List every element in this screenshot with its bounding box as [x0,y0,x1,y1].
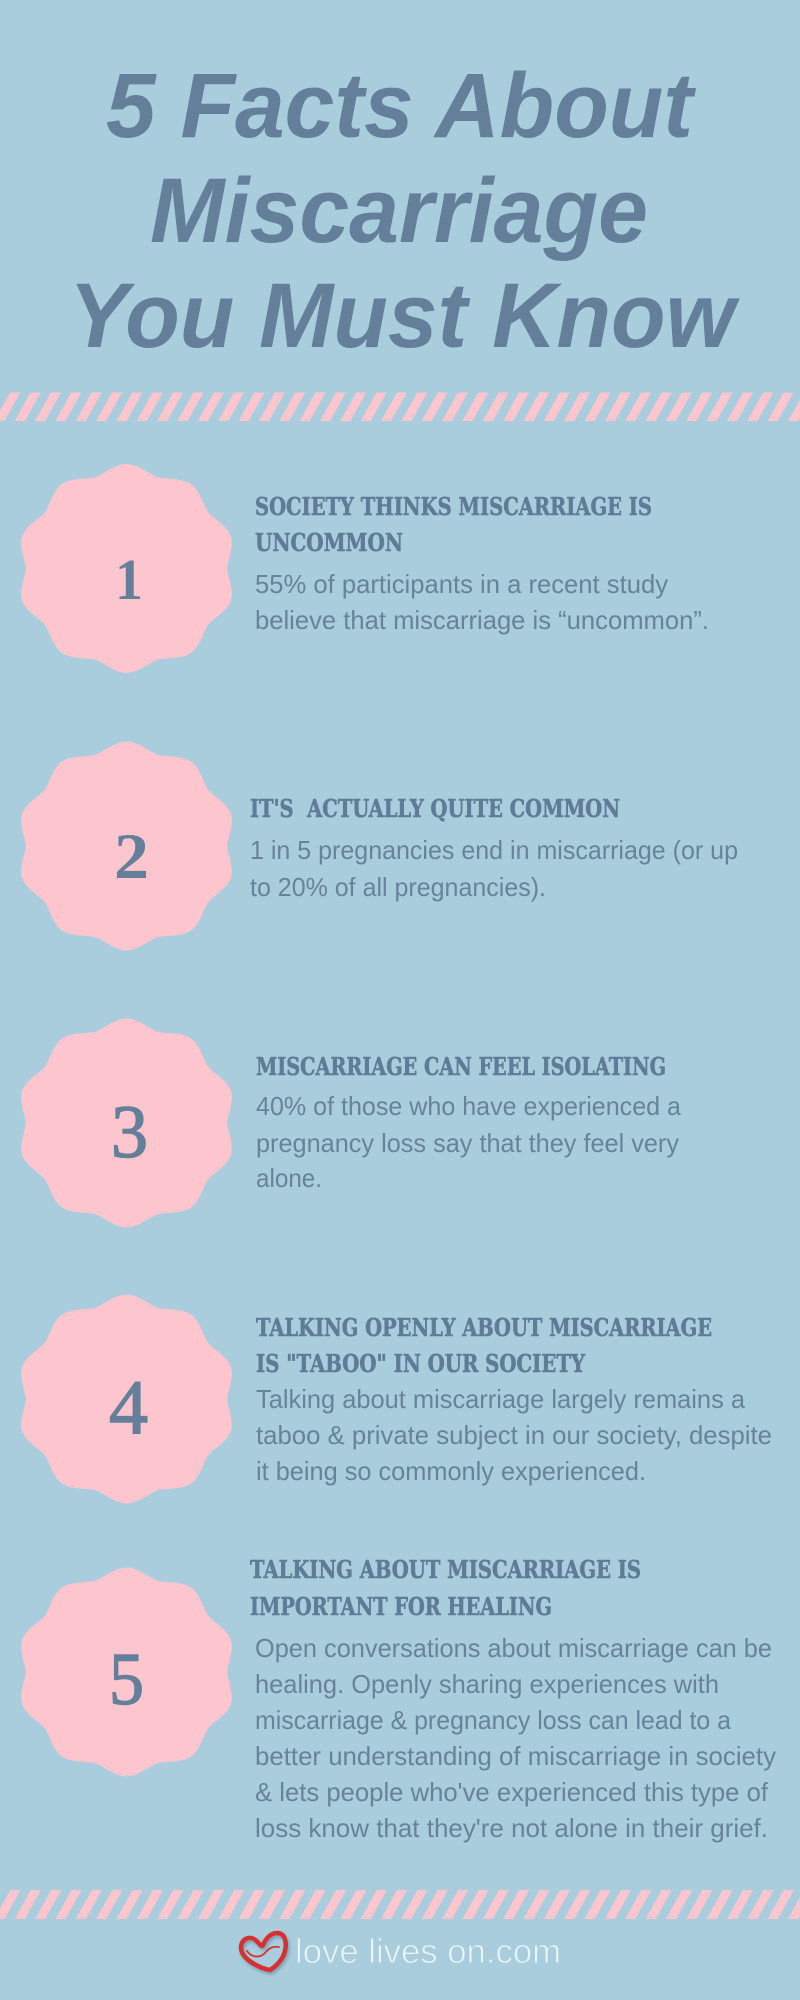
body: fact 2 [250,835,738,902]
body: fact 4: it being so commonly experienced. [256,1456,646,1486]
panel: fact 5 [21,1555,776,1843]
panel: fact 3 [21,1018,682,1228]
body: fact 1: believe that miscarriage is “uncommon”. [255,605,709,635]
body: fact 5: healing. Openly sharing experiences with [255,1669,719,1699]
body: fact 5 [255,1633,776,1843]
heading: fact 5: IMPORTANT FOR HEALING [250,1592,552,1621]
badge: number 2: 2 [114,821,149,893]
body: fact 5: miscarriage & pregnancy loss can lead to a [255,1705,732,1735]
title [69,55,740,367]
striped divider: bottom [0,1890,800,1919]
striped divider: top [0,392,800,421]
badge: number 4: 4 [109,1364,148,1450]
heading: fact 4: IS "TABOO" IN OUR SOCIETY [256,1349,586,1378]
heading: fact 1: SOCIETY THINKS MISCARRIAGE IS [255,492,652,521]
heading: fact 4 [256,1313,712,1378]
body: fact 3: alone. [256,1163,322,1193]
badge: number 1 [21,464,232,673]
body: fact 5: & lets people who've experienced this type of [255,1777,769,1807]
title: Miscarriage [150,160,648,262]
heading: fact 5: TALKING ABOUT MISCARRIAGE IS [250,1555,641,1584]
heading: fact 1: UNCOMMON [255,528,403,557]
panel: fact 1 [21,464,709,673]
body: fact 5: Open conversations about miscarriage can be [255,1633,772,1663]
body: fact 2: 1 in 5 pregnancies end in miscarriage (or up [250,835,738,865]
body: fact 4: taboo & private subject in our society, despite [256,1420,772,1450]
icon: red ribbon heart [241,1933,287,1972]
panel: fact 2 [21,742,738,950]
body: fact 5: loss know that they're not alone in their grief. [255,1813,768,1843]
title: 5 Facts About [106,55,696,157]
badge: number 1: 1 [115,547,143,612]
badge: number 4 [21,1294,232,1504]
body: fact 2: to 20% of all pregnancies). [250,872,546,902]
panel: fact 4 [21,1294,772,1504]
badge: number 5: 5 [109,1639,144,1721]
badge: number 5 [21,1568,232,1776]
wordmark: love lives on.com [295,1933,561,1971]
body: fact 5: better understanding of miscarriage in society [255,1741,776,1771]
body: fact 3: 40% of those who have experienced a [256,1091,682,1121]
body: fact 4 [256,1384,772,1486]
badge: number 2 [21,742,232,950]
heading: fact 5 [250,1555,641,1621]
body: fact 1 [255,569,709,635]
title: You Must Know [69,265,740,367]
badge: number 3: 3 [111,1091,148,1174]
heading: fact 1 [255,492,652,557]
heading: fact 3: MISCARRIAGE CAN FEEL ISOLATING [256,1052,666,1081]
body: fact 4: Talking about miscarriage largely remains a [256,1384,746,1414]
heading: fact 2: IT'S ACTUALLY QUITE COMMON [250,794,620,823]
badge: number 3 [21,1018,232,1228]
body: fact 1: 55% of participants in a recent study [255,569,668,599]
body: fact 3: pregnancy loss say that they feel very [256,1128,679,1158]
logo: love lives on.com [241,1933,561,1972]
body: fact 3 [256,1091,682,1193]
